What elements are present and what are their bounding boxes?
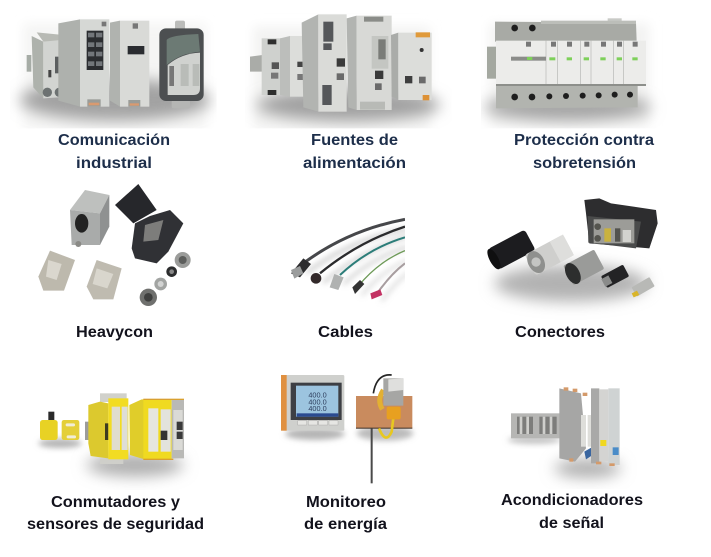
- heading: Heavycon: [76, 324, 153, 341]
- energy meter device: 400.0: [308, 397, 327, 406]
- panel: Conmutadores y sensores de seguridad: [27, 393, 204, 533]
- panel: Protección contra sobretensión: [484, 18, 654, 172]
- heading: Conectores: [515, 324, 605, 341]
- heading: sensores de seguridad: [27, 516, 204, 533]
- image: energy meter and clamp: [281, 375, 413, 483]
- heading: Conmutadores y: [51, 494, 180, 511]
- panel: Conectores: [485, 198, 658, 341]
- heading: Cables: [318, 324, 373, 341]
- panel: Heavycon: [38, 184, 191, 341]
- image: surge protector: [484, 18, 651, 127]
- heading: Monitoreo: [306, 494, 386, 511]
- panel: Monitoreo de energía: [281, 375, 413, 533]
- image: signal conditioners on rail: [508, 387, 621, 478]
- energy meter device: 400.0: [308, 404, 327, 413]
- panel: Fuentes de alimentación: [250, 14, 440, 172]
- heading: Acondicionadores: [501, 492, 643, 509]
- heading: industrial: [76, 155, 152, 172]
- heading: [27, 494, 204, 533]
- image: communication modules: [20, 19, 210, 130]
- heading: [303, 132, 406, 172]
- heading: Comunicación: [58, 132, 170, 149]
- image: heavy-duty connector parts: [38, 184, 191, 306]
- heading: de energía: [304, 516, 387, 533]
- image: safety modules: [38, 393, 184, 476]
- heading: [501, 492, 643, 532]
- heading: de señal: [539, 515, 604, 532]
- image: power supplies: [250, 14, 440, 130]
- panel: Acondicionadores de señal: [501, 387, 643, 532]
- panel: Comunicación industrial: [20, 19, 210, 172]
- heading: sobretensión: [533, 155, 636, 172]
- heading: [304, 494, 387, 533]
- energy meter device: 400.0: [308, 390, 327, 399]
- heading: alimentación: [303, 155, 406, 172]
- heading: Protección contra: [514, 132, 654, 149]
- image: cables fan: [291, 219, 408, 301]
- heading: [58, 132, 170, 172]
- heading: [514, 132, 654, 172]
- energy meter device: [281, 375, 344, 431]
- heading: Fuentes de: [311, 132, 398, 149]
- image: assorted connectors: [485, 198, 658, 302]
- panel: Cables: [291, 219, 408, 341]
